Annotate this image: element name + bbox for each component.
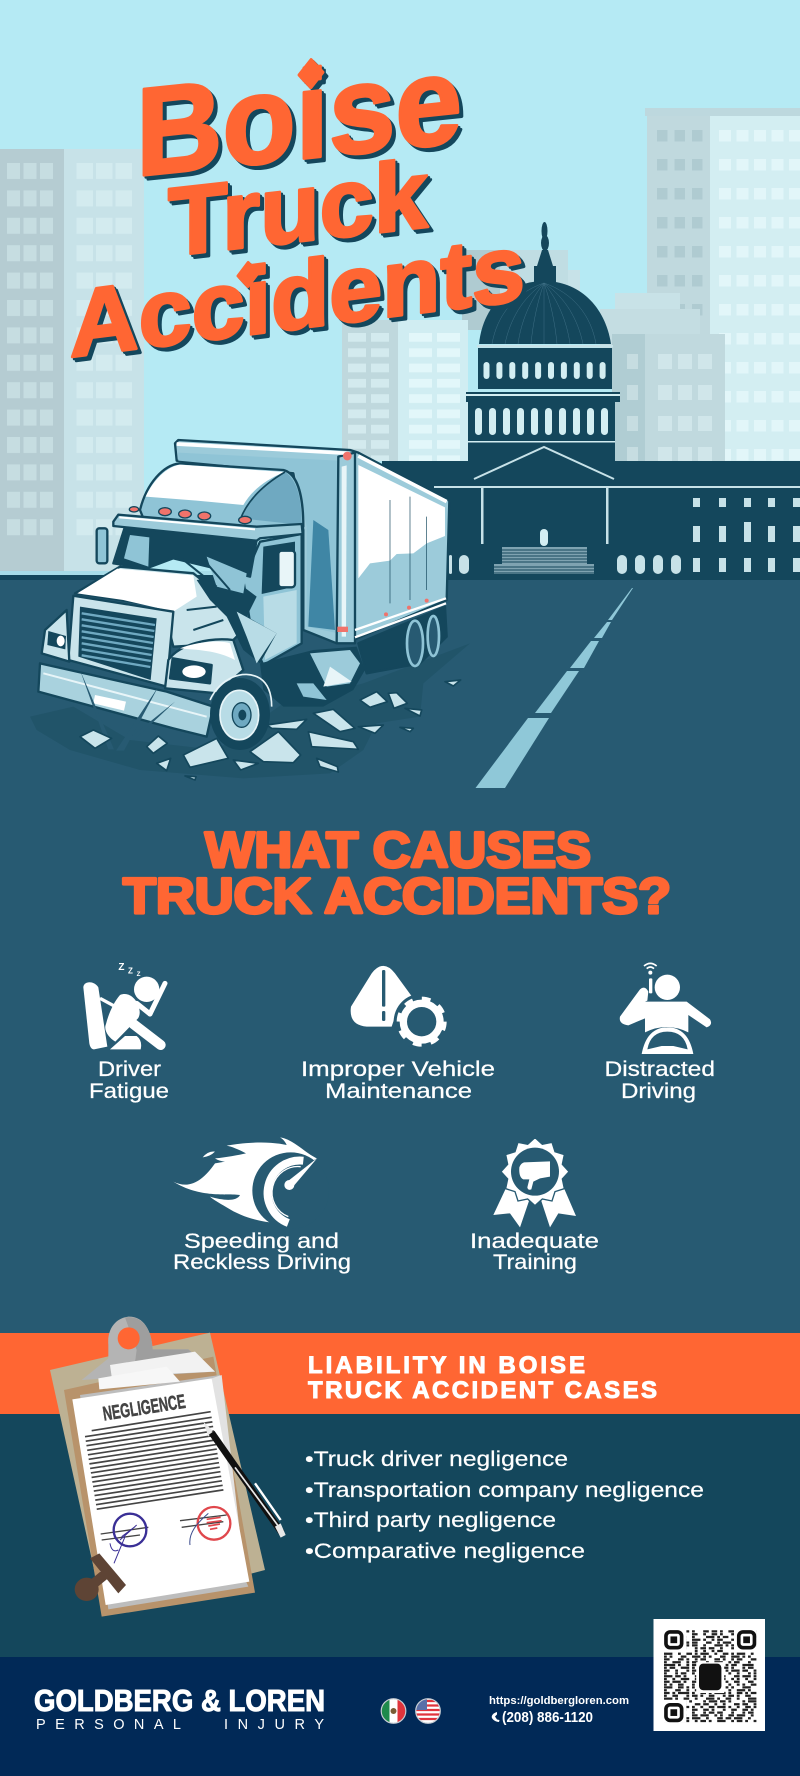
ground edge strip xyxy=(0,571,382,580)
icon: driver on phone xyxy=(620,963,711,1054)
icon: sleeping driver xyxy=(83,962,165,1049)
rear wheels xyxy=(407,616,439,666)
document heading: NEGLIGENCE xyxy=(101,1391,187,1426)
liability bullet list: •Transportation company negligence xyxy=(305,1479,704,1502)
cause: speeding and reckless driving xyxy=(173,1137,351,1274)
label: improper vehicle maintenance: Improper Vehicle xyxy=(301,1057,495,1081)
label: distracted driving: Distracted xyxy=(604,1057,715,1081)
skyline: right tower xyxy=(645,108,800,461)
contact details: https://goldbergloren.com xyxy=(489,1695,629,1707)
front wheel xyxy=(210,674,272,750)
section heading: what causes: TRUCK ACCIDENTS? xyxy=(123,868,671,924)
logo: Goldberg & Loren: GOLDBERG & LOREN xyxy=(34,1684,325,1718)
contact details: (208) 886-1120 xyxy=(502,1710,593,1726)
bumper and plate xyxy=(38,663,213,737)
left mirror xyxy=(97,528,107,563)
cause: improper vehicle maintenance xyxy=(301,966,495,1103)
label: inadequate training xyxy=(470,1229,599,1274)
label: improper vehicle maintenance xyxy=(301,1057,495,1103)
logo: Goldberg & Loren: PERSONAL xyxy=(36,1717,181,1733)
cargo box xyxy=(175,440,449,673)
windshield xyxy=(113,527,257,577)
cause: distracted driving xyxy=(604,963,715,1103)
red stamp xyxy=(190,1507,230,1545)
label: driver fatigue xyxy=(89,1057,169,1103)
logo: Goldberg & Loren: INJURY xyxy=(224,1717,324,1733)
ground shadow xyxy=(30,643,470,778)
road surface xyxy=(0,580,800,1333)
title word Truck: Truck xyxy=(168,139,429,277)
blue stamp xyxy=(110,1514,146,1563)
cab roof fairing xyxy=(140,463,303,530)
icon: Mexico flag xyxy=(381,1699,406,1723)
label: speeding and reckless driving xyxy=(173,1229,351,1274)
capitol dome xyxy=(479,281,611,344)
liability orange banner xyxy=(0,1333,800,1414)
label: inadequate training: Training xyxy=(493,1250,577,1274)
illustration: crashed truck xyxy=(30,440,470,780)
QR code xyxy=(654,1619,765,1731)
liability orange banner: LIABILITY IN BOISE xyxy=(308,1352,585,1379)
clipboard back xyxy=(50,1333,265,1612)
capitol upper colonnade xyxy=(477,345,613,389)
capitol building xyxy=(382,222,800,580)
label: driver fatigue: Fatigue xyxy=(89,1079,169,1103)
liability orange banner: TRUCK ACCIDENT CASES xyxy=(308,1377,657,1404)
icon: sleeping driver: Z xyxy=(128,966,133,975)
title: Boise Truck Accidents xyxy=(70,29,525,378)
label: speeding and reckless driving: Speeding and xyxy=(184,1229,339,1253)
label: speeding and reckless driving: Reckless Driving xyxy=(173,1250,351,1274)
icon: warning triangle and gear xyxy=(351,966,450,1050)
liability bullet list: •Comparative negligence xyxy=(305,1540,585,1563)
debris fragments xyxy=(80,680,461,780)
contact details xyxy=(489,1695,629,1726)
icon: flaming speedometer xyxy=(173,1137,329,1229)
cab visor xyxy=(113,515,303,541)
illustration: negligence clipboard xyxy=(50,1317,286,1617)
label: driver fatigue: Driver xyxy=(98,1057,161,1081)
hood xyxy=(75,552,277,663)
skyline: left tower xyxy=(0,149,144,572)
icon: sleeping driver: Z xyxy=(118,962,124,973)
capitol spire xyxy=(534,222,556,282)
icon: ribbon with thumbs down xyxy=(493,1138,576,1227)
liability bullet list: •Third party negligence xyxy=(305,1509,556,1532)
icon: USA flag xyxy=(416,1699,440,1723)
footer band xyxy=(0,1657,800,1776)
liability bullet list xyxy=(305,1448,704,1563)
door xyxy=(243,534,302,665)
skyline: centre buildings behind capitol xyxy=(342,250,725,461)
label: inadequate training: Inadequate xyxy=(470,1229,599,1253)
road centre dashes xyxy=(476,588,633,788)
pen xyxy=(203,1422,286,1538)
cab marker lights xyxy=(129,507,251,524)
liability panel background xyxy=(0,1414,800,1657)
liability bullet list: •Truck driver negligence xyxy=(305,1448,568,1471)
paper stack xyxy=(72,1375,249,1609)
crumpled fender and right headlight xyxy=(165,639,243,693)
left headlight xyxy=(42,610,69,662)
title word Boise: Boise xyxy=(136,29,462,203)
clipboard front xyxy=(64,1357,255,1617)
rubber stamp xyxy=(75,1553,126,1601)
document text lines xyxy=(85,1412,223,1509)
sky background xyxy=(0,0,800,576)
signature lines xyxy=(101,1515,227,1540)
rubble pile xyxy=(260,647,365,707)
capitol steps xyxy=(494,547,594,574)
cause: inadequate training xyxy=(470,1138,599,1274)
capitol wings xyxy=(382,447,800,580)
capitol lower colonnade xyxy=(466,392,620,462)
label: distracted driving: Driving xyxy=(621,1079,696,1103)
logo: Goldberg & Loren xyxy=(34,1684,325,1733)
grille xyxy=(68,596,173,687)
clipboard clip xyxy=(82,1317,215,1389)
icon: sleeping driver: Z xyxy=(137,971,141,978)
title word Accidents: Accidents xyxy=(70,215,525,378)
label: improper vehicle maintenance: Maintenance xyxy=(325,1079,472,1103)
cause: driver fatigue xyxy=(83,962,169,1103)
label: distracted driving xyxy=(604,1057,715,1103)
section heading: what causes: WHAT CAUSES xyxy=(205,822,591,878)
section heading: what causes xyxy=(123,822,671,924)
impact cracks xyxy=(80,670,175,751)
